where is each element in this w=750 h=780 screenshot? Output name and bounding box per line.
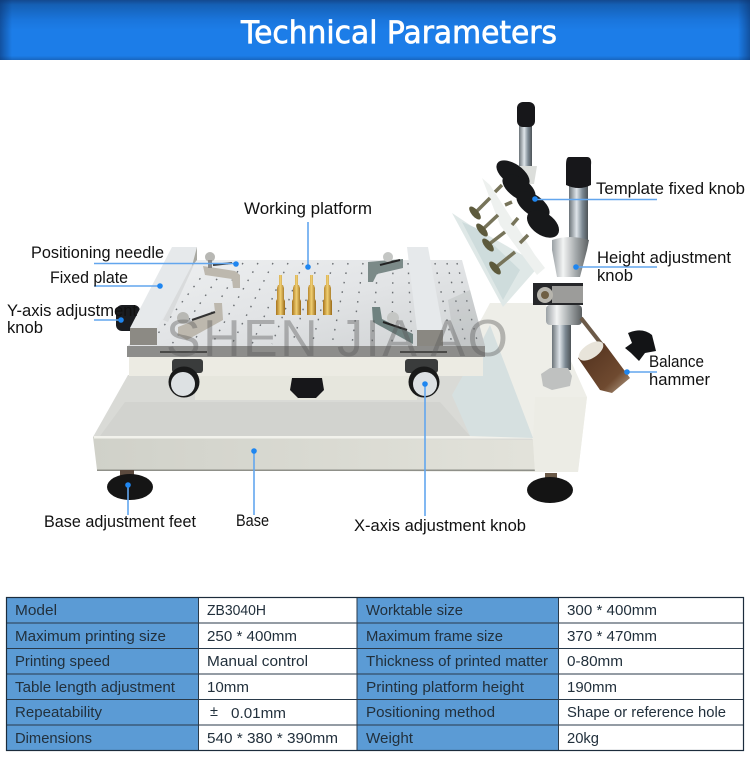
right column values: 300 * 400mm [567,603,657,619]
left column values: Manual control [207,654,308,670]
left column values: 540 * 380 * 390mm [207,731,338,747]
clamps [177,252,413,344]
right column labels [366,603,548,747]
left column labels: Maximum printing size [15,629,166,645]
balance hammer [575,318,656,393]
left column values [207,603,338,747]
callout: fixed plate [50,269,163,289]
left column labels: Table length adjustment [15,680,175,696]
front grey strip [127,346,485,357]
base top surface [93,375,535,441]
right column labels: Weight [366,731,413,747]
right column labels: Thickness of printed matter [366,654,548,670]
left fixed plate [130,247,197,345]
callout: base: Base [236,512,269,530]
callout: Y-axis adjustment knob [7,302,137,337]
callout: positioning needle: Positioning needle [31,244,164,262]
lower support block [195,376,417,400]
callout: balance hammer [624,353,711,389]
callout: positioning needle [31,244,239,267]
foot: right [527,473,573,503]
callout: template fixed knob: Template fixed knob [596,180,745,198]
callout: working platform [244,200,372,270]
foot: left [107,470,153,500]
left column values: ± [210,704,218,720]
left column labels: Model [15,603,57,619]
callout: height adjustment knob [573,249,731,285]
left column labels: Dimensions [15,731,92,747]
right column values: 0-80mm [567,654,623,670]
base front face [93,437,578,472]
height adjustment collar [533,237,589,390]
watermark: SHEN JIA AO [166,310,508,368]
template fixed knobs [492,155,564,243]
right column labels: Worktable size [366,603,463,619]
right upright column [470,303,587,472]
Y-axis knob [116,305,140,331]
specification table [6,597,744,750]
brass pins [276,275,332,315]
right column values: 20kg [567,731,599,747]
callout: fixed plate: Fixed plate [50,269,128,287]
callout: template fixed knob [532,180,745,202]
left column values: 10mm [207,680,249,696]
callout: base adjustment feet: Base adjustment feet [44,513,196,531]
right column values [567,603,726,747]
work platform [128,260,485,346]
title: Technical Parameters [240,15,557,51]
right fixed plate [407,247,443,346]
front knob: left [168,359,203,398]
right column values: 370 * 470mm [567,629,657,645]
right column values: 190mm [567,680,617,696]
callout: height adjustment knob: Height adjustment [597,249,731,267]
left column labels [15,603,175,747]
callout: base adjustment feet [44,482,196,531]
header banner [0,0,750,60]
callout: Y-axis adjustment knob: knob [7,319,43,337]
callout: X-axis adjustment knob [354,381,526,535]
callout: base [236,448,269,530]
right column values: Shape or reference hole [567,705,726,721]
product photo: stencil printer [93,102,656,503]
left column labels: Printing speed [15,654,110,670]
callout: height adjustment knob: knob [597,267,633,285]
right column labels: Maximum frame size [366,629,503,645]
front threaded rod [566,157,591,240]
rear threaded rod [515,102,537,184]
right column labels: Positioning method [366,705,495,721]
left column values: ZB3040H [207,603,266,619]
center knob [290,378,324,398]
left column values: 250 * 400mm [207,629,297,645]
front knob: right [405,359,440,398]
white front bar [129,357,483,376]
callout: Y-axis adjustment knob: Y-axis adjustment [7,302,137,320]
left column labels: Repeatability [15,705,103,721]
left column values: 0.01mm [231,706,286,722]
right column labels: Printing platform height [366,680,524,696]
callout: working platform: Working platform [244,200,372,218]
callout: X-axis adjustment knob: X-axis adjustment knob [354,517,526,535]
callout: balance hammer: Balance [649,353,704,371]
template frame [452,178,545,307]
callout: balance hammer: hammer [649,371,711,389]
